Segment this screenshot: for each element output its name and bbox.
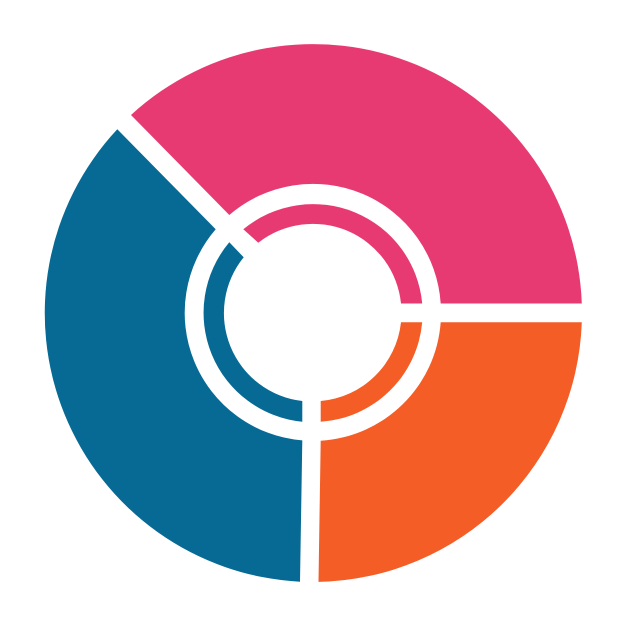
pink inner arc <box>243 204 422 304</box>
orange outer band <box>318 322 582 582</box>
blue outer band <box>45 129 302 582</box>
panel: pink segment <box>131 44 582 303</box>
orange inner arc <box>321 322 422 422</box>
panel: orange segment <box>318 322 582 582</box>
pink outer band <box>131 44 582 303</box>
blue inner arc <box>204 242 302 422</box>
panel: blue segment <box>45 129 302 582</box>
